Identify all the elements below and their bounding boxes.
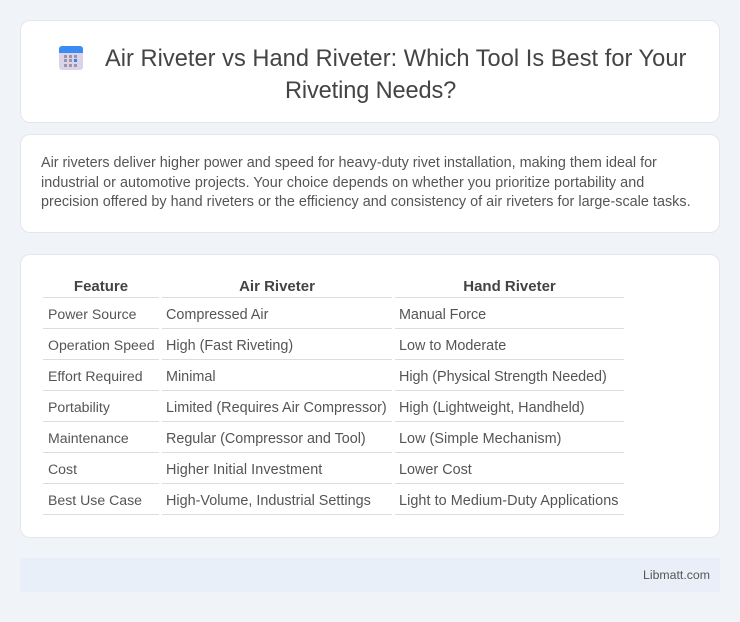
comparison table (43, 278, 624, 515)
row: best use case: Light to Medium-Duty Applications (399, 493, 619, 509)
row: operation speed: High (Fast Riveting) (166, 338, 293, 354)
row: power source: Manual Force (399, 307, 486, 323)
row: portability: High (Lightweight, Handheld) (399, 400, 585, 416)
intro panel (20, 134, 720, 233)
row: power source: Power Source (48, 306, 137, 322)
title: Riveting Needs? (285, 78, 456, 104)
title: Air Riveter vs Hand Riveter: Which Tool Is Best for Your (105, 46, 686, 72)
row: operation speed (43, 337, 624, 360)
table header (43, 278, 624, 298)
row: operation speed: Low to Moderate (399, 338, 506, 354)
table header: Feature (74, 278, 128, 295)
title (105, 46, 686, 104)
row: maintenance (43, 430, 624, 453)
row: maintenance: Low (Simple Mechanism) (399, 431, 561, 447)
row: portability: Portability (48, 399, 110, 415)
row: portability (43, 399, 624, 422)
row: operation speed: Operation Speed (48, 337, 155, 353)
row: portability: Limited (Requires Air Compressor) (166, 400, 387, 416)
row: maintenance: Maintenance (48, 430, 129, 446)
intro text: precision offered by hand riveters or the efficiency and consistency of air riveters for large-scale tasks. (41, 194, 691, 210)
row: cost: Lower Cost (399, 462, 472, 478)
row: effort required: Minimal (166, 369, 216, 385)
row: effort required (43, 368, 624, 391)
row: power source: Compressed Air (166, 307, 268, 323)
table panel (20, 254, 720, 538)
table header: Air Riveter (239, 278, 315, 295)
row: best use case: High-Volume, Industrial Settings (166, 493, 371, 509)
row: effort required: Effort Required (48, 368, 143, 384)
footer credit: Libmatt.com (643, 568, 710, 582)
footer bar (20, 558, 720, 592)
row: cost: Cost (48, 461, 77, 477)
row: cost: Higher Initial Investment (166, 462, 322, 478)
header panel (20, 20, 720, 123)
row: power source (43, 306, 624, 329)
row: best use case: Best Use Case (48, 492, 142, 508)
row: effort required: High (Physical Strength Needed) (399, 369, 607, 385)
intro text: industrial or automotive projects. Your choice depends on whether you prioritize portability and (41, 174, 644, 190)
row: best use case (43, 492, 624, 515)
icon: calendar (59, 46, 83, 70)
table header: Hand Riveter (463, 278, 556, 295)
intro text: Air riveters deliver higher power and speed for heavy-duty rivet installation, making them ideal for (41, 155, 657, 171)
row: cost (43, 461, 624, 484)
row: maintenance: Regular (Compressor and Tool) (166, 431, 366, 447)
intro text (41, 155, 691, 210)
